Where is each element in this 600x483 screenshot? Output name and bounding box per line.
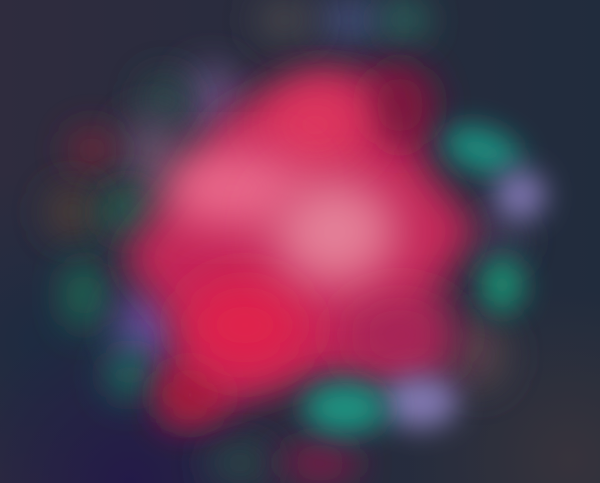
blob: top brown [255, 0, 315, 40]
blob: right dark [478, 218, 522, 262]
blob: lower left green [64, 261, 104, 329]
dark lower right [340, 295, 460, 375]
blob: top blue [316, 0, 384, 40]
star base [120, 68, 478, 425]
bright top [260, 85, 370, 165]
blob: bottom lilac [382, 376, 458, 428]
blob: lower left teal [106, 351, 154, 399]
blob: upper right lilac [494, 169, 546, 221]
blob: right green [480, 257, 524, 313]
blob: top green [383, 0, 427, 40]
blob: upper left green [141, 74, 189, 126]
blob: upper left purple [182, 64, 242, 136]
right and bottom teal and lilac blobs [303, 117, 546, 434]
blob: bottom maroon [280, 443, 360, 483]
pink left highlight [160, 150, 304, 226]
outer ring of coloured blobs [46, 0, 522, 483]
central red star [120, 63, 478, 425]
blob: upper right teal [437, 117, 527, 183]
pink centre highlight [273, 178, 397, 286]
blob: bottom grey green [206, 443, 274, 483]
blob: left green [102, 186, 154, 238]
bright bottom [183, 277, 307, 373]
blob: left grey [120, 114, 180, 186]
blob: left brown [46, 186, 98, 238]
blob: left dark red [68, 128, 116, 172]
dark upper right [364, 63, 436, 147]
lower left deep red [156, 367, 224, 423]
blob: lower right brown [452, 319, 508, 391]
blob: bottom teal [303, 382, 387, 434]
blob: lower left purple [116, 288, 180, 368]
